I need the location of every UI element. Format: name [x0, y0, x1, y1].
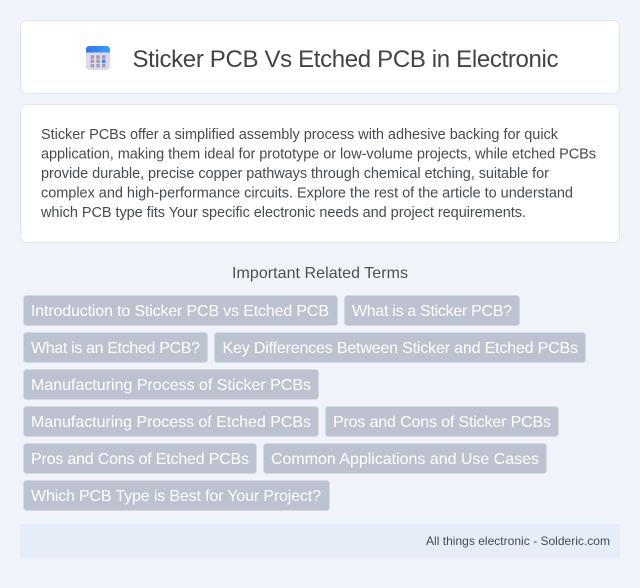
tag: key differences: Key Differences Between Sticker and Etched PCBs [222, 340, 578, 357]
text block: description: which PCB type fits Your specific electronic needs and project requirements. [40, 205, 526, 221]
title: Sticker PCB Vs Etched PCB in Electronic [132, 46, 558, 73]
text block: description [40, 127, 596, 221]
tag: manufacturing etched: Manufacturing Process of Etched PCBs [31, 414, 311, 431]
tag: what is an etched pcb: What is an Etched PCB? [31, 340, 200, 357]
footer credit: All things electronic - Solderic.com [426, 534, 610, 548]
tag: pros and cons sticker [326, 406, 558, 436]
panel: title header [20, 20, 620, 94]
tag: pros and cons etched [24, 444, 256, 474]
tag: introduction: Introduction to Sticker PCB vs Etched PCB [31, 303, 329, 320]
text block: description: provide durable, precise copper pathways through chemical etching, suitable for [41, 166, 549, 182]
tag: manufacturing sticker: Manufacturing Process of Sticker PCBs [31, 377, 311, 394]
icon: calendar grid [86, 46, 110, 70]
panel: description [20, 104, 620, 242]
tag: manufacturing etched [24, 406, 318, 436]
heading: related terms: Important Related Terms [232, 265, 408, 282]
text block: description: application, making them ideal for prototype or low-volume projects, while etched PCBs [41, 146, 596, 162]
tag list: related terms [24, 296, 586, 510]
tag: what is a sticker pcb: What is a Sticker PCB? [352, 303, 512, 320]
tag: what is an etched pcb [24, 332, 208, 362]
tag: key differences [214, 332, 586, 362]
tag: applications: Common Applications and Use Cases [271, 451, 539, 468]
tag: manufacturing sticker [24, 370, 318, 400]
text block: description: Sticker PCBs offer a simplified assembly process with adhesive backing for quick [41, 127, 559, 143]
footer [20, 524, 620, 558]
tag: which type: Which PCB Type is Best for Your Project? [31, 488, 321, 505]
tag: pros and cons etched: Pros and Cons of Etched PCBs [31, 451, 249, 468]
tag: applications [264, 444, 546, 474]
tag: which type [24, 480, 330, 510]
tag: introduction [24, 296, 338, 326]
text block: description: complex and high-performance circuits. Explore the rest of the article to understand [41, 186, 573, 202]
tag: what is a sticker pcb [344, 296, 520, 326]
tag: pros and cons sticker: Pros and Cons of Sticker PCBs [333, 414, 551, 431]
